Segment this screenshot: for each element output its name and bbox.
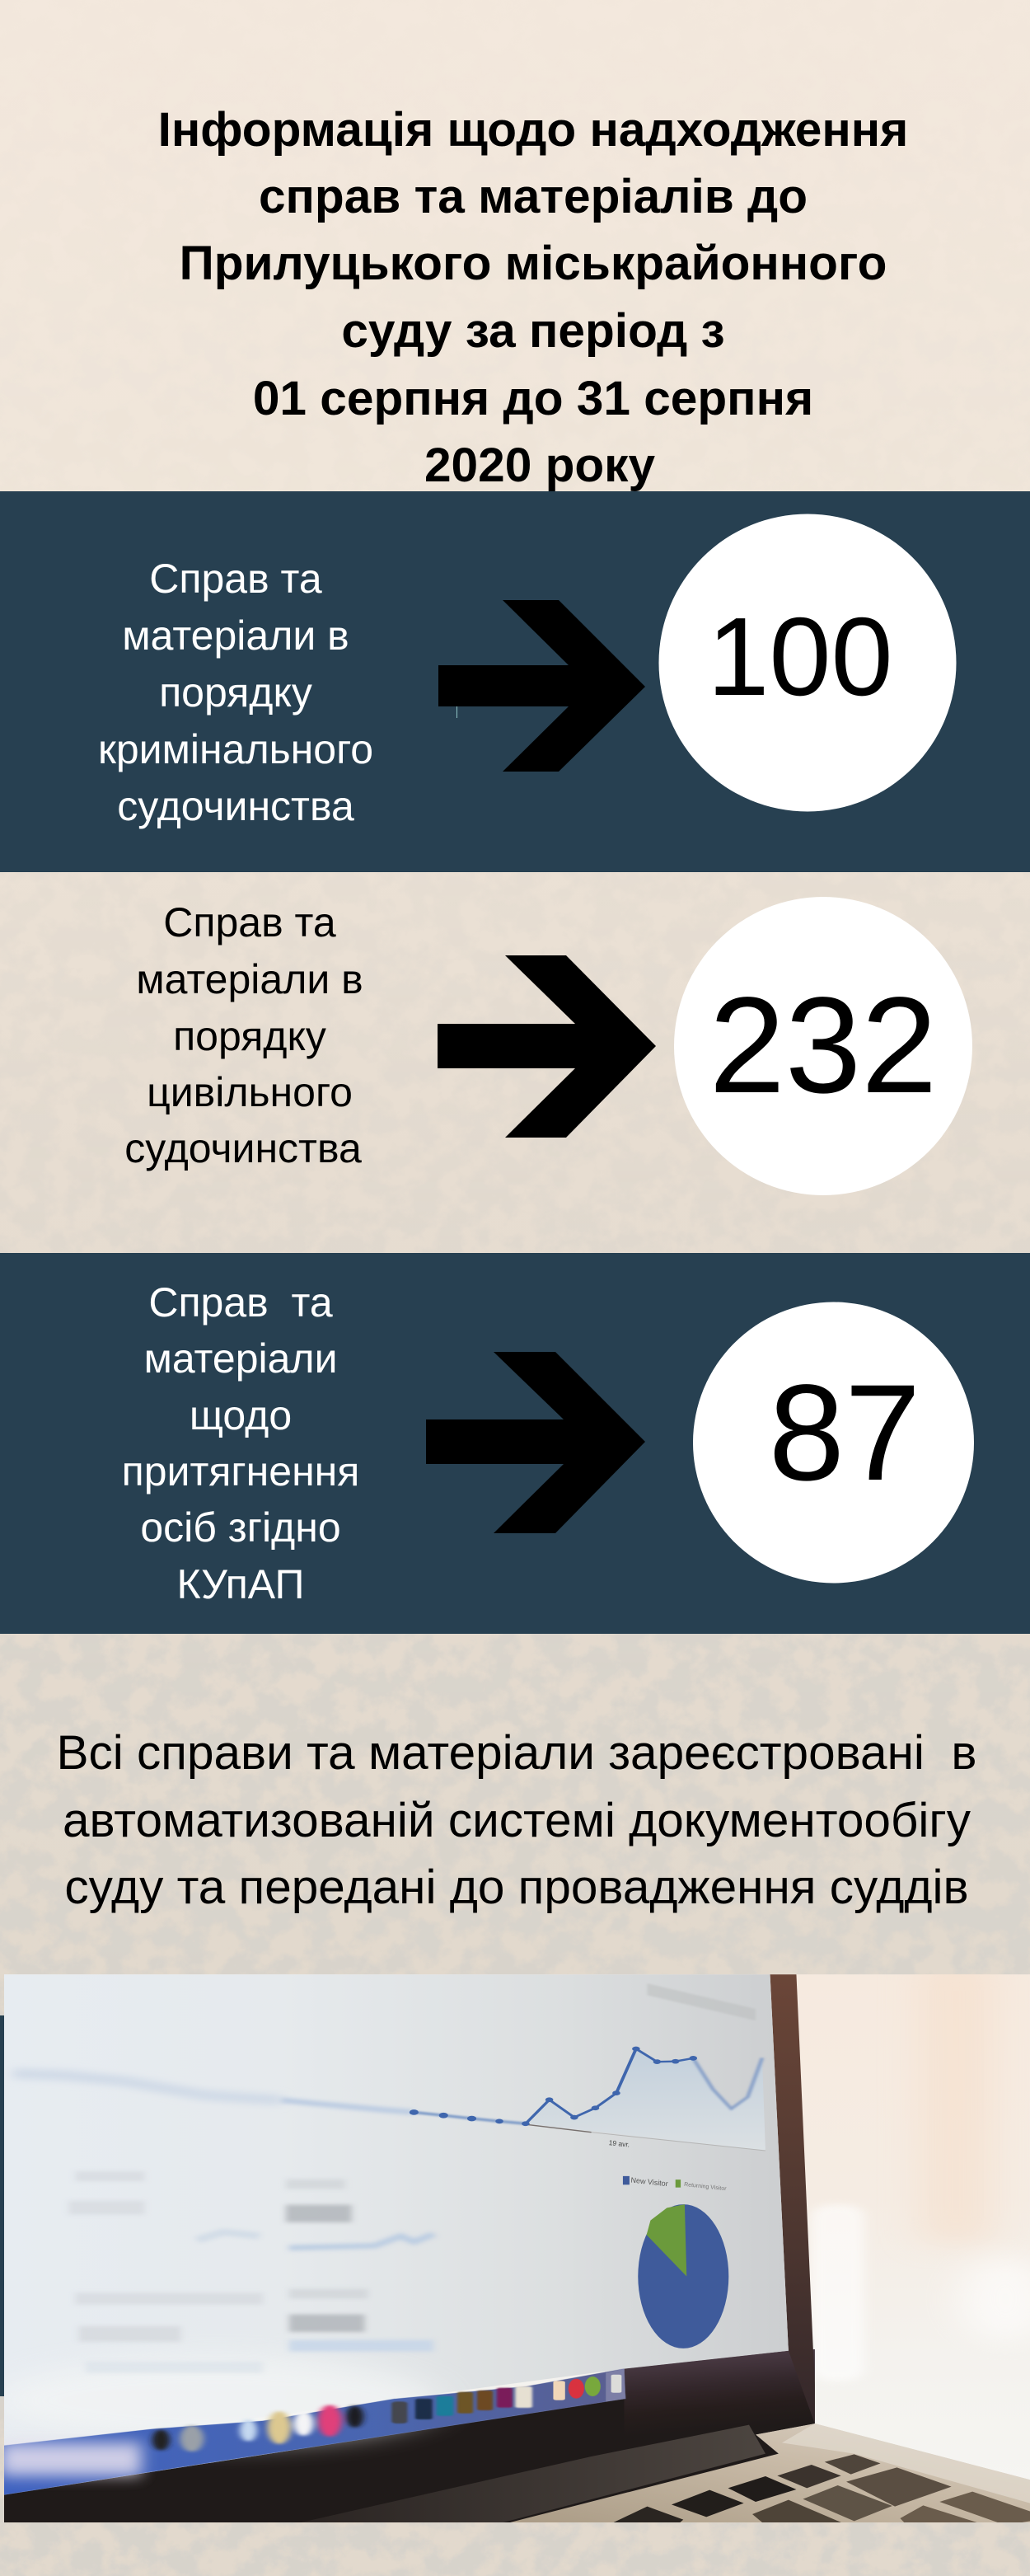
laptop base and keyboard — [493, 2424, 1030, 2525]
text block: closing note — [57, 1726, 976, 1914]
band 1 label: порядку — [159, 669, 312, 716]
arrow 1 — [438, 600, 645, 772]
title: справ та матеріалів до — [259, 170, 808, 223]
title: 2020 року — [424, 439, 655, 492]
photo: laptop with analytics dashboard — [0, 1962, 1030, 2525]
band 1 label — [98, 556, 373, 829]
band 3 circle — [693, 1302, 974, 1583]
band 1 label: кримінального — [98, 726, 373, 772]
band 1 label: матеріали в — [122, 612, 349, 659]
line chart: 19 avr. — [608, 2138, 630, 2149]
pie chart — [623, 2176, 728, 2348]
band 3 background — [0, 1253, 1030, 1634]
hinge — [289, 2425, 765, 2525]
band 1 circle — [659, 514, 956, 811]
pie chart: Returning Visitor — [684, 2182, 727, 2192]
dark sliver behind photo — [0, 2015, 4, 2396]
text block: closing note: суду та передані до провадження суддів — [64, 1860, 969, 1914]
text block: closing note: автоматизованій системі документообігу — [63, 1794, 971, 1847]
screen and chart content — [0, 1974, 815, 2452]
band 1 number: 100 — [707, 594, 893, 719]
pie chart: New Visitor — [630, 2176, 668, 2188]
line chart — [13, 2047, 765, 2151]
band 3 label: щодо — [190, 1392, 292, 1438]
bezel side — [770, 1974, 815, 2424]
title: 01 серпня до 31 серпня — [253, 372, 813, 425]
band 2 number: 232 — [709, 969, 937, 1122]
band 3 label: Справ та — [148, 1279, 333, 1326]
laptop bezel lower — [3, 2349, 815, 2525]
band 2 label: цивільного — [147, 1069, 353, 1115]
band 1 background — [0, 491, 1030, 872]
band 2 label: судочинства — [124, 1125, 362, 1171]
band 2 label — [124, 899, 363, 1171]
title: Інформація щодо надходження — [158, 103, 908, 157]
date selector — [647, 1983, 756, 2020]
band 2 label: порядку — [173, 1013, 326, 1059]
band 2 label: матеріали в — [136, 956, 363, 1002]
title — [158, 103, 908, 492]
band 2 circle — [674, 897, 972, 1195]
band 3 label: матеріали — [143, 1335, 338, 1382]
title: Прилуцького міськрайонного — [180, 237, 887, 290]
arrow 2 — [438, 955, 656, 1138]
band 1 label: Справ та — [149, 556, 322, 602]
band 2 label: Справ та — [163, 899, 336, 945]
panel: civil cases — [124, 897, 972, 1195]
band 3 label: осіб згідно — [140, 1504, 341, 1551]
panel: criminal cases — [0, 491, 1030, 872]
panel: administrative offences — [0, 1253, 1030, 1634]
band 3 label: притягнення — [122, 1448, 359, 1494]
screen — [3, 1974, 789, 2452]
room background — [3, 1962, 1030, 2522]
arrow 3 — [426, 1352, 645, 1533]
small tick under arrow 1 — [456, 706, 457, 718]
text block: closing note: Всі справи та матеріали зареєстровані в — [57, 1726, 976, 1780]
legend — [623, 2176, 630, 2184]
dock with app icons — [0, 2368, 625, 2495]
band 3 label: КУпАП — [176, 1561, 305, 1607]
band 1 label: судочинства — [117, 783, 354, 829]
band 3 label — [122, 1279, 359, 1607]
band 3 number: 87 — [769, 1357, 920, 1509]
blurred dashboard tiles — [69, 2171, 433, 2373]
title: суду за період з — [341, 304, 725, 358]
